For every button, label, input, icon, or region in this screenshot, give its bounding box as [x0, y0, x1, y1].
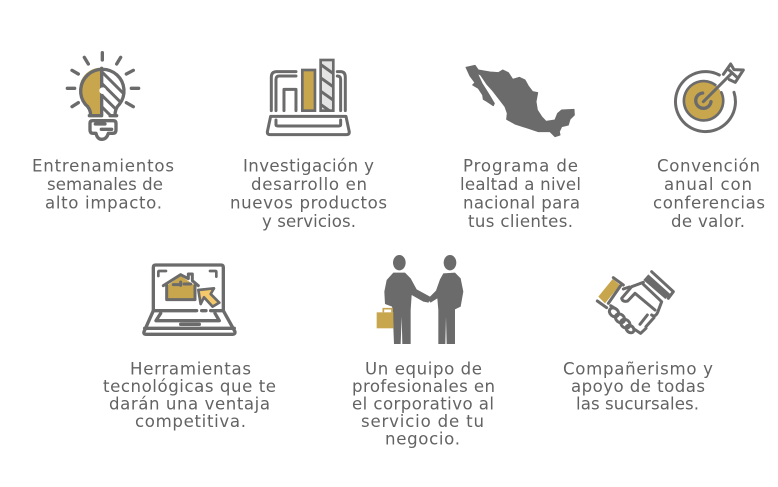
text: convención [653, 156, 765, 231]
text: herramientas: darán una ventaja [109, 394, 270, 414]
text: investigación: nuevos productos [230, 194, 387, 212]
text: entrenamientos [32, 156, 174, 212]
text: herramientas: Herramientas [130, 360, 251, 378]
text: entrenamientos: alto impacto. [45, 194, 162, 212]
text: equipo: el corporativo al [352, 394, 494, 414]
icon: map of Mexico [466, 65, 574, 137]
text: compañerismo: Compañerismo y [563, 360, 713, 378]
text: equipo [352, 360, 495, 448]
text: equipo: profesionales en [352, 377, 495, 396]
text: programa de lealtad: tus clientes. [468, 212, 573, 231]
text: equipo: servicio de tu [361, 412, 484, 431]
text: entrenamientos: Entrenamientos [32, 156, 174, 176]
icon: right man [427, 255, 463, 344]
text: convención: anual con [664, 175, 752, 194]
text: investigación [230, 156, 387, 231]
text: compañerismo [563, 360, 713, 414]
text: convención: conferencias [653, 194, 765, 212]
icon: laptop with bars [267, 60, 349, 135]
text: equipo: negocio. [385, 430, 460, 448]
text: herramientas: competitiva. [135, 412, 246, 431]
text: programa de lealtad: lealtad a nivel [460, 175, 581, 194]
text: convención: Convención [657, 156, 760, 176]
text: convención: de valor. [671, 212, 745, 231]
icon: left man [384, 255, 430, 344]
text: programa de lealtad: nacional para [463, 194, 580, 212]
text: herramientas [103, 360, 276, 431]
icon: briefcase [377, 309, 393, 328]
text: investigación: y servicios. [262, 212, 356, 231]
text: programa de lealtad: Programa de [463, 156, 578, 176]
text: equipo: Un equipo de [365, 360, 482, 378]
icon: light bulb [67, 53, 139, 139]
icon: handshake [597, 272, 673, 334]
text: programa de lealtad [460, 156, 581, 231]
icon: target with arrow [675, 64, 743, 132]
text: herramientas: tecnológicas que te [103, 377, 276, 396]
text: investigación: Investigación y [243, 156, 374, 176]
text: investigación: desarrollo en [251, 175, 367, 194]
text: compañerismo: apoyo de todas [571, 377, 705, 396]
icon: two businessmen shaking hands [377, 255, 463, 344]
icon: laptop with house [144, 265, 235, 334]
text: entrenamientos: semanales de [47, 175, 163, 194]
text: compañerismo: las sucursales. [576, 394, 699, 414]
